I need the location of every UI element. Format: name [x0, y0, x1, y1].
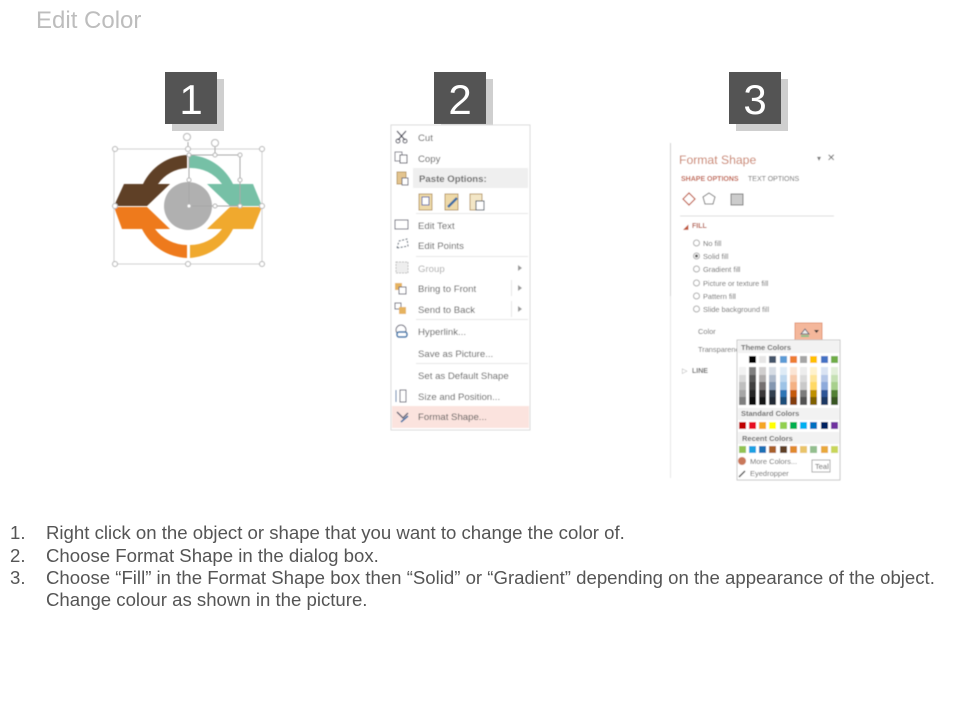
- icon: paste: [397, 172, 408, 185]
- icon: send to back: [395, 303, 406, 314]
- menu labels: Bring to Front: [418, 284, 476, 295]
- menu icons: [395, 131, 484, 422]
- centre circle: [164, 182, 212, 230]
- tooltip: teal: Teal: [815, 462, 829, 471]
- more colors: More Colors...: [750, 457, 797, 466]
- selection handles: [112, 134, 264, 266]
- fill options: Solid fill: [703, 252, 729, 261]
- instructions list: Choose Format Shape in the dialog box.: [46, 545, 379, 566]
- panel heading: Format Shape: [679, 153, 756, 167]
- step 3 badge: [729, 72, 788, 131]
- menu labels: Format Shape...: [418, 412, 487, 423]
- recent colors row: [739, 446, 838, 453]
- fill section heading: ◢: [683, 224, 689, 231]
- amber arrow: [190, 207, 262, 258]
- instructions list: [10, 522, 935, 610]
- icons: paste options: [419, 194, 484, 210]
- menu labels: Group: [418, 264, 445, 275]
- transparency label: Transparency: [698, 345, 743, 354]
- icon: size and position: [396, 390, 406, 402]
- menu labels: Send to Back: [418, 305, 475, 316]
- fill section heading: FILL: [692, 223, 707, 230]
- panel controls: ✕: [827, 153, 835, 164]
- line section: LINE: [692, 368, 708, 375]
- step 1 badge: 1: [179, 76, 203, 123]
- title: Edit Color: [36, 7, 141, 34]
- tab icons: [683, 193, 743, 205]
- brown arrow: [114, 155, 187, 206]
- instructions list: 1.: [10, 522, 26, 543]
- menu labels: Size and Position...: [418, 392, 500, 403]
- panel controls: [817, 153, 835, 164]
- eyedropper: Eyedropper: [750, 469, 789, 478]
- fill options: Pattern fill: [703, 292, 736, 301]
- menu labels: Edit Text: [418, 221, 455, 232]
- step 1 badge: [165, 72, 224, 131]
- instructions list: Right click on the object or shape that you want to change the color of.: [46, 522, 625, 543]
- instructions list: 3.: [10, 567, 26, 588]
- theme colors row: [739, 356, 838, 363]
- color dropdown: [737, 340, 840, 480]
- step 2 badge: [434, 72, 493, 131]
- menu labels: Hyperlink...: [418, 327, 466, 338]
- menu dividers: [416, 214, 528, 364]
- icon: group: [396, 262, 408, 273]
- icon: edit text: [395, 220, 408, 229]
- submenu arrows: [518, 265, 522, 312]
- icon: hyperlink: [396, 325, 407, 337]
- tabs: [681, 176, 800, 183]
- instructions list: Change colour as shown in the picture.: [46, 589, 367, 610]
- color row: Color: [698, 327, 716, 336]
- standard colors row: [739, 422, 838, 429]
- fill options: Gradient fill: [703, 265, 741, 274]
- menu labels: Save as Picture...: [418, 349, 493, 360]
- icon: bring to front: [395, 283, 406, 294]
- color dropdown: Standard Colors: [741, 409, 799, 418]
- circular arrows diagram: [112, 134, 264, 266]
- menu labels: [418, 133, 509, 423]
- color dropdown: Theme Colors: [741, 343, 791, 352]
- line section: ▷: [682, 368, 688, 375]
- tabs: TEXT OPTIONS: [748, 176, 800, 183]
- fill options: Slide background fill: [703, 305, 770, 314]
- menu labels: Set as Default Shape: [418, 371, 509, 382]
- instructions list: Choose “Fill” in the Format Shape box then “Solid” or “Gradient” depending on the appearance of the object.: [46, 567, 935, 588]
- fill section heading: [683, 223, 707, 231]
- highlighted rows: [392, 168, 529, 428]
- tabs: SHAPE OPTIONS: [681, 176, 739, 183]
- instructions list: 2.: [10, 545, 26, 566]
- menu labels: Copy: [418, 154, 441, 165]
- step 2 badge: 2: [448, 76, 472, 123]
- format shape panel: [670, 143, 840, 480]
- orange arrow: [114, 207, 187, 258]
- color row: [698, 323, 822, 340]
- line section: [682, 368, 708, 375]
- fill options: [694, 239, 770, 314]
- fill options: No fill: [703, 239, 722, 248]
- icon: edit points: [397, 239, 408, 248]
- menu labels: Edit Points: [418, 241, 464, 252]
- panel controls: ▾: [817, 154, 821, 163]
- color dropdown: Recent Colors: [742, 434, 793, 443]
- theme color shades: [739, 367, 838, 405]
- teal arrow: [189, 155, 262, 206]
- menu labels: Paste Options:: [419, 174, 487, 185]
- step 3 badge: 3: [743, 76, 767, 123]
- icon: format shape: [397, 412, 408, 422]
- icon: copy: [395, 152, 407, 163]
- fill options: Picture or texture fill: [703, 279, 769, 288]
- context menu panel: [391, 125, 530, 430]
- menu labels: Cut: [418, 133, 433, 144]
- icon: cut: [396, 131, 407, 143]
